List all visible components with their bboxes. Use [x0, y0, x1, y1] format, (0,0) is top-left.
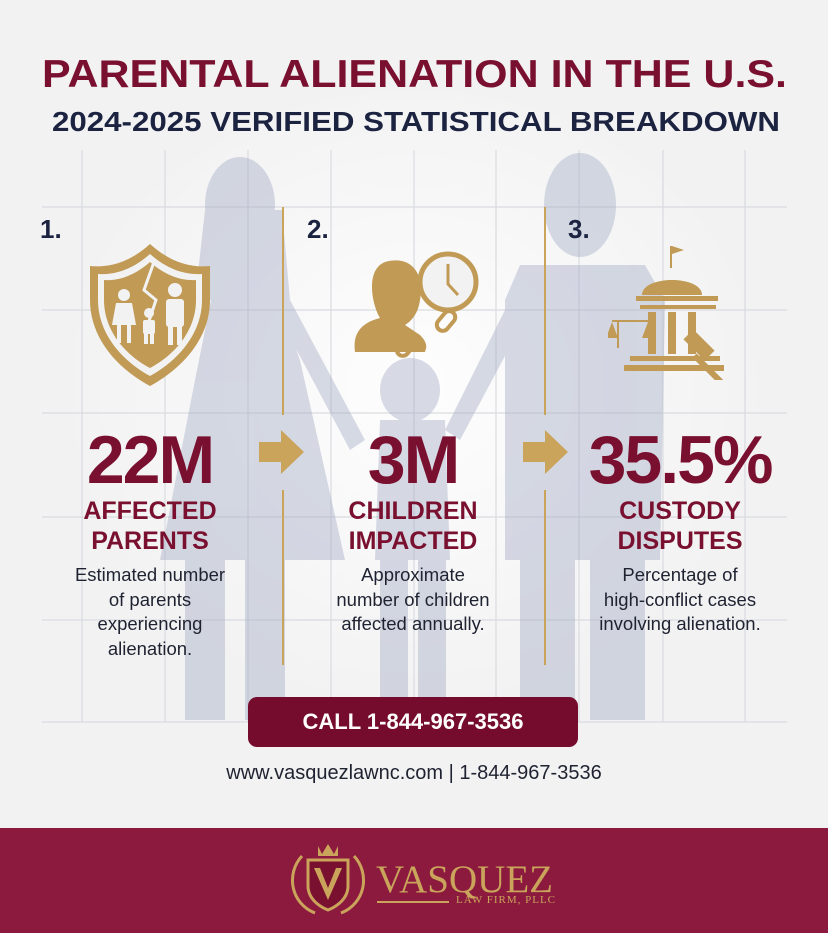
logo: wordmark: VASQUEZ — [376, 858, 553, 901]
stat 1: 22M: Estimated number — [75, 564, 225, 585]
stat 3: 35.5%: CUSTODY — [619, 497, 741, 525]
stat 2: 3M: Approximate — [361, 564, 465, 585]
footer bar: LAW FIRM, PLLC — [456, 894, 556, 906]
stat 2: 3M: number of children — [336, 588, 490, 610]
stat 1: 22M: PARENTS — [91, 527, 209, 555]
stat 3: 35.5%: involving alienation. — [599, 613, 761, 634]
stat 2: 3M: IMPACTED — [349, 527, 477, 555]
stat 1: 22M: 22M — [87, 422, 213, 498]
stat 3: 35.5%: DISPUTES — [617, 527, 743, 555]
step numbers: 1. — [40, 214, 62, 244]
stat 1: 22M — [75, 422, 225, 658]
stat 1: 22M: of parents — [109, 588, 191, 610]
logo: crest — [290, 844, 366, 914]
title: PARENTAL ALIENATION IN THE U.S. — [42, 53, 787, 95]
stat 1: 22M: AFFECTED — [83, 497, 217, 525]
stat 2: 3M: affected annually. — [341, 613, 485, 634]
stat 2: 3M — [336, 422, 490, 634]
icon: shield with family — [90, 244, 210, 386]
call button — [248, 697, 578, 747]
icon: child with clock and broken chain — [354, 252, 478, 358]
stat 3: 35.5%: high-conflict cases — [604, 588, 756, 610]
stat 3: 35.5%: Percentage of — [622, 564, 738, 585]
subtitle: 2024-2025 VERIFIED STATISTICAL BREAKDOWN — [52, 106, 780, 137]
arrow 1 — [259, 430, 304, 474]
stat 1: 22M: alienation. — [108, 638, 192, 658]
footer bar — [0, 828, 828, 933]
stat 2: 3M: 3M — [368, 422, 458, 498]
step numbers: 2. — [307, 214, 329, 244]
step numbers — [40, 214, 590, 244]
arrow 2 — [523, 430, 568, 474]
stat 3: 35.5%: 35.5% — [589, 422, 771, 498]
step numbers: 3. — [568, 214, 590, 244]
stat 1: 22M: experiencing — [98, 613, 202, 634]
dividers — [282, 207, 546, 665]
call button: CALL 1-844-967-3536 — [303, 709, 523, 734]
website and phone: www.vasquezlawnc.com | 1-844-967-3536 — [226, 762, 602, 784]
stat 3: 35.5% — [589, 422, 772, 634]
icon: courthouse, scales and gavel — [608, 246, 724, 380]
stat 2: 3M: CHILDREN — [348, 497, 478, 525]
